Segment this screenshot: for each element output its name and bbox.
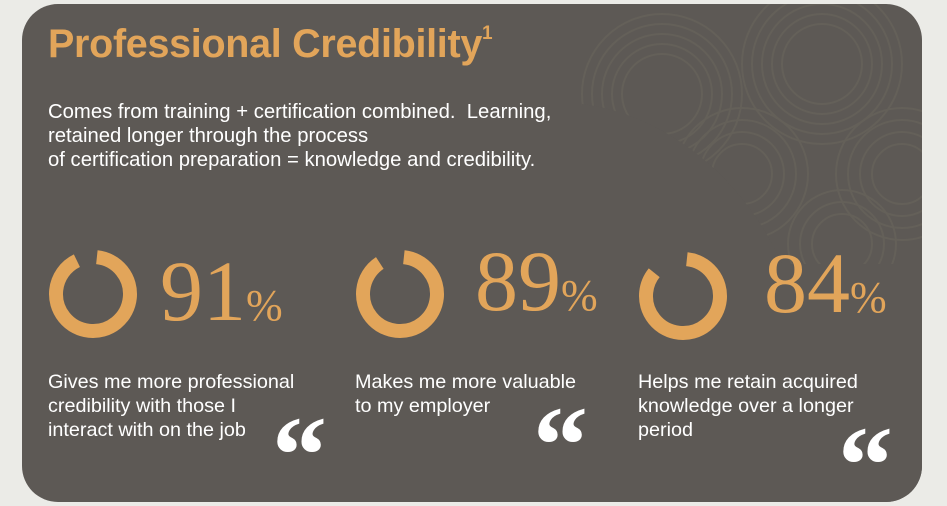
caption 1: Gives me more professional <box>48 371 294 393</box>
caption 3: Helps me retain acquired <box>638 371 858 393</box>
ring chart 91 <box>49 250 137 338</box>
text block: intro: Comes from training + certification combined. Learning, <box>48 101 551 123</box>
ring chart 89 <box>356 250 444 338</box>
caption 3 <box>638 371 858 441</box>
text block: intro: retained longer through the process <box>48 125 368 147</box>
stat 1 <box>48 243 327 502</box>
ring chart 84 <box>639 252 727 340</box>
title: Professional Credibility1 <box>48 22 492 66</box>
text block: intro <box>48 101 551 171</box>
caption 1: interact with on the job <box>48 419 246 441</box>
number 89%: 89% <box>475 233 598 329</box>
caption 3: period <box>638 419 693 441</box>
caption 2 <box>355 371 576 417</box>
caption 1: credibility with those I <box>48 395 236 417</box>
caption 2: Makes me more valuable <box>355 371 576 393</box>
number 91%: 91% <box>160 243 283 339</box>
stat 3 <box>638 235 893 502</box>
caption 3: knowledge over a longer <box>638 395 854 417</box>
caption 2: to my employer <box>355 395 490 417</box>
caption 1 <box>48 371 294 441</box>
number 84%: 84% <box>764 235 887 331</box>
stat 2 <box>355 233 598 502</box>
text block: intro: of certification preparation = knowledge and credibility. <box>48 149 535 171</box>
